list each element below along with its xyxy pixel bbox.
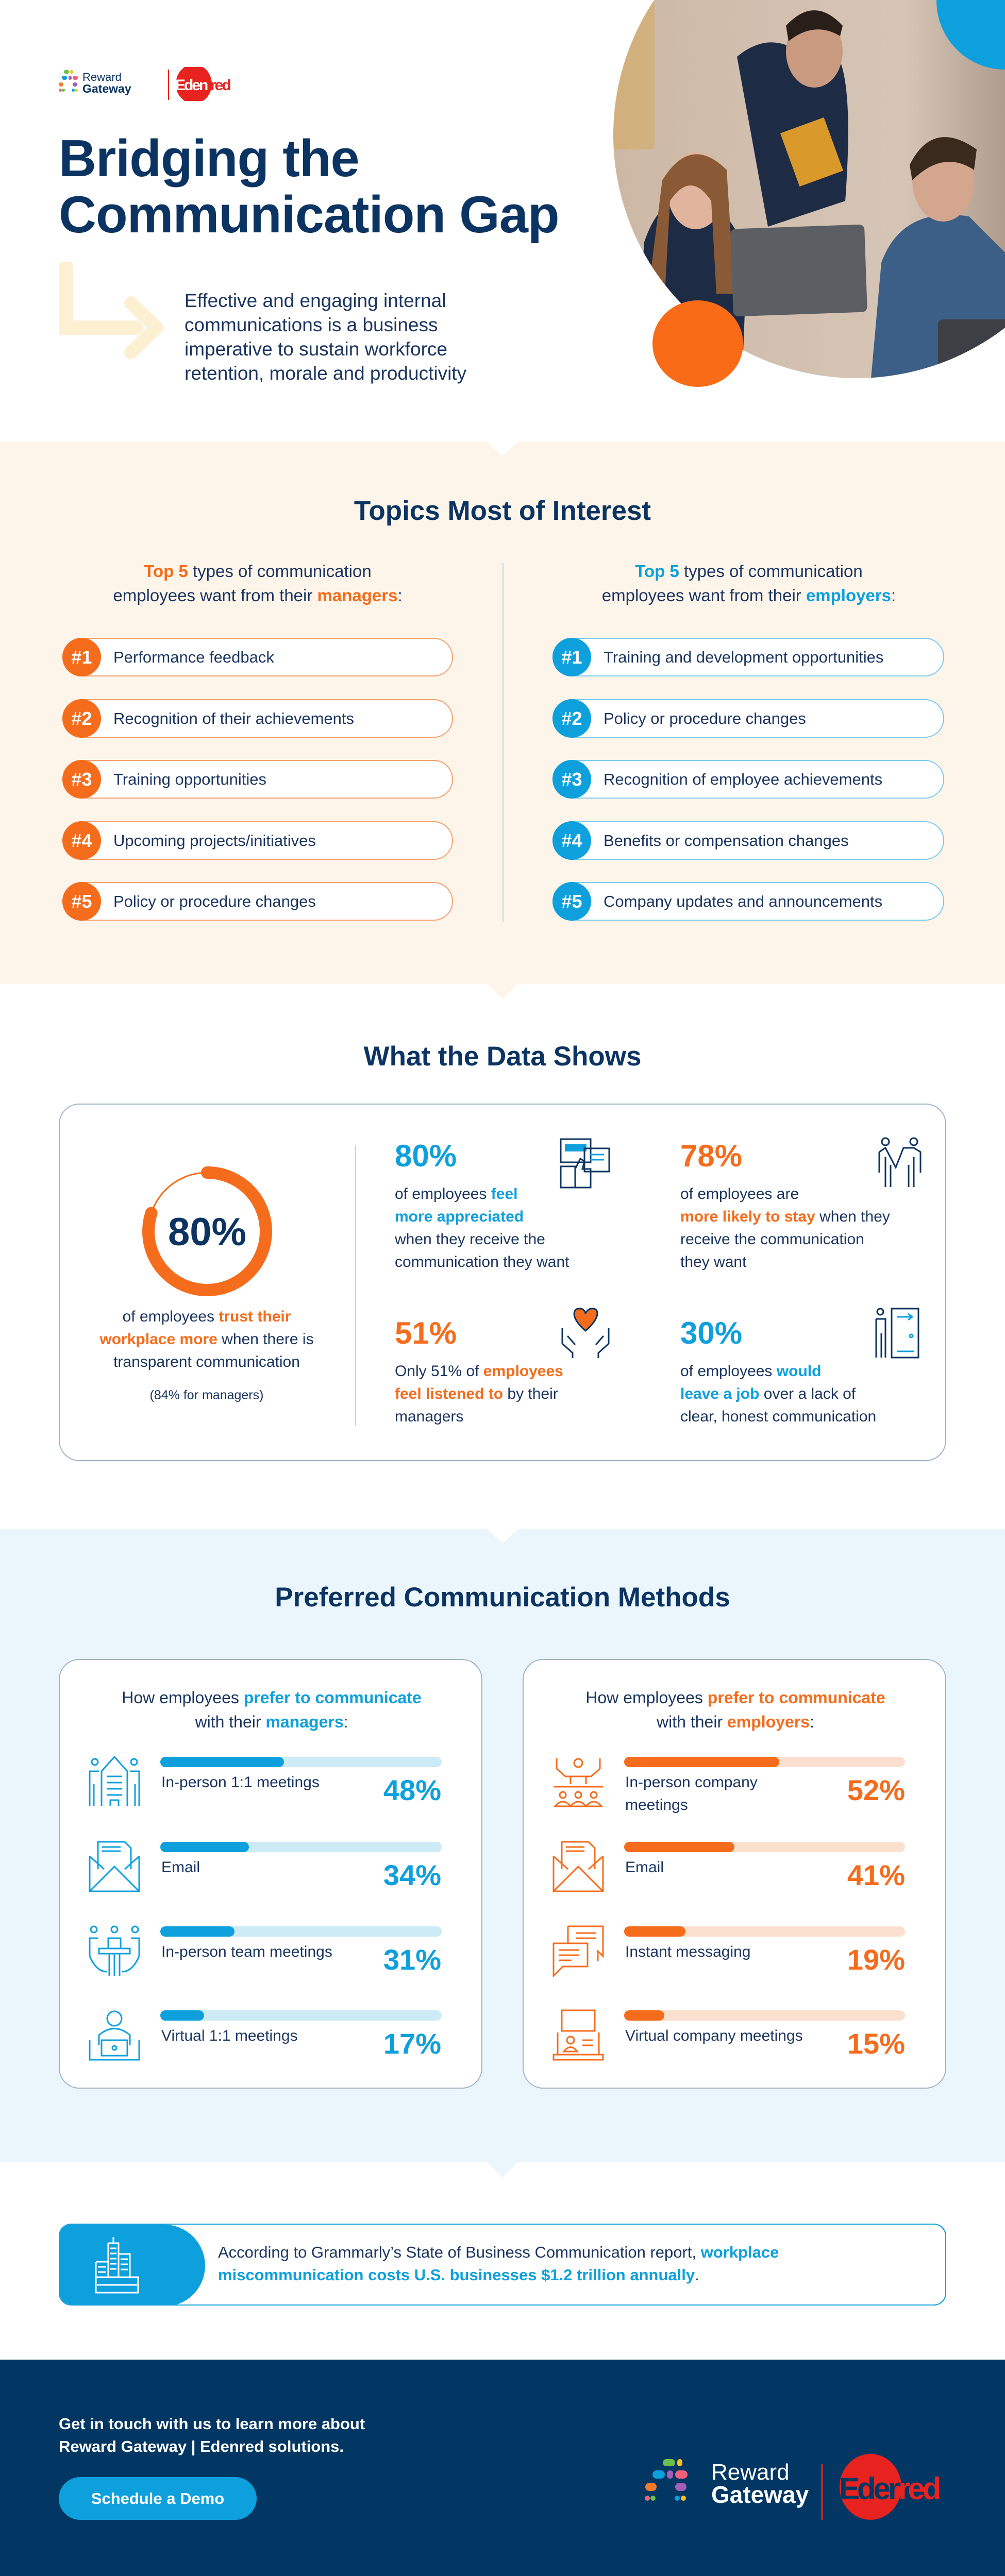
row: team: 31% (383, 1943, 441, 1976)
row: virtual: 17% (383, 2027, 441, 2060)
list: employers: Benefits or compensation changes (604, 832, 849, 850)
photo (613, 0, 1005, 378)
list: managers (62, 638, 453, 921)
callout: grammarly (59, 2224, 946, 2306)
row: email (89, 1841, 442, 1892)
decoration: blue circle (936, 0, 1005, 70)
card: employers (523, 1659, 946, 2089)
stat: 80% appreciated (395, 1139, 610, 1270)
row: 1:1 (89, 1756, 442, 1806)
list: employers: #1 (561, 647, 582, 668)
card: managers: How employees prefer to communicate (122, 1688, 422, 1707)
panel: methods background (0, 1529, 1005, 2162)
stat: 51% listened: Only 51% of employees (395, 1363, 563, 1380)
button: schedule demo (59, 2477, 257, 2520)
list: employers: #5 (561, 891, 582, 912)
list: employers: Policy or procedure changes (604, 709, 806, 727)
stat: 80% appreciated: communication they want (395, 1253, 569, 1270)
stat: 51% listened: 51% (395, 1316, 457, 1350)
row: company meetings: meetings (625, 1797, 688, 1814)
stat: 30% leave (680, 1308, 919, 1425)
stat: 78% stay: receive the communication (680, 1231, 864, 1248)
list: managers: Policy or procedure changes (113, 892, 316, 910)
footer logo: Gateway (711, 2481, 809, 2508)
donut chart (142, 1166, 272, 1296)
heading: data: What the Data Shows (364, 1041, 641, 1072)
list: managers: #3 (71, 769, 92, 790)
callout: grammarly: According to Grammarly’s State of Business Communication report, workplace miscommunication costs U.S. businesses $1.2 trillion annually. (218, 2243, 779, 2284)
row: virtual: Virtual 1:1 meetings (161, 2027, 298, 2044)
row: virtual (89, 2010, 442, 2061)
subheading: managers: Top 5 types of communication (144, 562, 372, 581)
list: employers: #3 (561, 769, 582, 790)
icon: heart hands (562, 1308, 609, 1358)
header logo (59, 67, 230, 101)
row: email: 41% (847, 1859, 905, 1891)
stat: 78% stay: they want (680, 1253, 746, 1270)
list: managers: #2 (71, 708, 92, 729)
stat: 78% stay: 78% (680, 1139, 742, 1173)
list: managers: Recognition of their achievements (113, 709, 354, 727)
title: Communication Gap (59, 186, 559, 244)
stat: 51% listened (395, 1308, 609, 1425)
row: email: 34% (383, 1859, 441, 1891)
stat: 80% appreciated: when they receive the (395, 1231, 545, 1248)
stat: 78% stay: of employees are (680, 1185, 799, 1202)
card: managers: with their managers: (195, 1713, 348, 1731)
subheading: managers (113, 562, 403, 605)
row: instant messaging (552, 1926, 905, 1977)
footer text: Reward Gateway | Edenred solutions. (59, 2437, 344, 2455)
list: managers: #5 (71, 891, 92, 912)
subtitle: communications is a business (185, 314, 438, 335)
list: managers: Performance feedback (113, 648, 274, 666)
decoration: orange circle (652, 300, 743, 387)
list: employers (552, 638, 944, 921)
stat: 30% leave: of employees would (680, 1363, 821, 1380)
heading: topics: Topics Most of Interest (354, 496, 651, 526)
row: team: In-person team meetings (161, 1943, 332, 1960)
stat: 51% listened: feel listened to by their (395, 1385, 558, 1402)
stat: 30% leave: 30% (680, 1316, 742, 1350)
row: virtual company (552, 2009, 905, 2061)
header logo: Gateway (82, 82, 131, 95)
stat: 80% appreciated: 80% (395, 1139, 457, 1173)
donut caption (99, 1308, 314, 1402)
list: employers: Training and development opportunities (604, 648, 883, 666)
row: company meetings: 52% (847, 1774, 905, 1806)
icon: thumbs up chat (560, 1139, 610, 1188)
donut caption: (84% for managers) (150, 1388, 263, 1402)
header logo: Reward (82, 71, 122, 83)
footer logo: Reward (711, 2460, 790, 2485)
list: employers: #2 (561, 708, 582, 729)
donut caption: transparent communication (113, 1353, 300, 1370)
row: team (89, 1926, 442, 1976)
header logo: red (210, 77, 230, 94)
subtitle: retention, morale and productivity (185, 363, 466, 384)
stat: 30% leave: leave a job over a lack of (680, 1385, 856, 1402)
panel: data (59, 1104, 946, 1461)
subtitle: Effective and engaging internal (185, 290, 446, 311)
stat: 51% listened: managers (395, 1408, 463, 1425)
footer logo: red (898, 2471, 940, 2506)
row: instant messaging: Instant messaging (625, 1943, 750, 1960)
donut caption: workplace more when there is (99, 1331, 314, 1348)
stat: 80% appreciated: of employees feel (395, 1185, 517, 1202)
icon: handshake people (878, 1138, 922, 1187)
list: managers: #1 (71, 647, 92, 668)
card: employers: How employees prefer to communicate (585, 1688, 885, 1707)
subheading: employers: employees want from their employers: (602, 586, 896, 605)
stat: 78% stay: more likely to stay when they (680, 1208, 890, 1225)
row: instant messaging: 19% (847, 1943, 905, 1976)
row: 1:1: 48% (383, 1774, 441, 1806)
title: Bridging the (59, 130, 359, 188)
row: email: Email (161, 1859, 200, 1876)
row: virtual company: 15% (847, 2027, 905, 2060)
subtitle: imperative to sustain workforce (185, 338, 447, 360)
subheading: managers: employees want from their managers: (113, 586, 403, 605)
stat: 78% stay (680, 1138, 922, 1270)
row: company meetings (554, 1757, 905, 1814)
header logo: Eden (175, 77, 208, 94)
donut chart: 80% (168, 1210, 246, 1254)
stat: 30% leave: clear, honest communication (680, 1408, 876, 1425)
footer logo (645, 2454, 940, 2520)
row: email: Email (625, 1859, 664, 1876)
row: 1:1: In-person 1:1 meetings (161, 1774, 320, 1791)
footer text (59, 2415, 365, 2455)
panel: topics (0, 442, 1005, 984)
title (59, 130, 559, 244)
stat: 80% appreciated: more appreciated (395, 1208, 524, 1225)
row: company meetings: In-person company (625, 1774, 758, 1791)
icon: exit door (875, 1308, 919, 1358)
row: email (552, 1841, 905, 1892)
list: employers: Company updates and announcements (604, 892, 882, 910)
footer (0, 2360, 1005, 2576)
subheading: employers: Top 5 types of communication (635, 562, 863, 581)
list: employers: #4 (561, 830, 582, 851)
subheading: employers (602, 562, 896, 605)
donut caption: of employees trust their (123, 1308, 291, 1325)
card: employers: with their employers: (657, 1713, 814, 1731)
icon: buildings (60, 2225, 205, 2307)
card: managers (59, 1659, 482, 2089)
list: managers: Training opportunities (113, 770, 266, 788)
footer logo: Eden (839, 2471, 905, 2506)
button: schedule demo: Schedule a Demo (91, 2489, 224, 2507)
icon: arrow (59, 262, 163, 359)
list: employers: Recognition of employee achievements (604, 770, 882, 788)
subtitle (185, 290, 466, 384)
footer text: Get in touch with us to learn more about (59, 2415, 365, 2433)
row: virtual company: Virtual company meetings (625, 2027, 803, 2044)
list: managers: #4 (71, 830, 92, 851)
heading: methods: Preferred Communication Methods (275, 1582, 730, 1613)
list: managers: Upcoming projects/initiatives (113, 832, 316, 850)
